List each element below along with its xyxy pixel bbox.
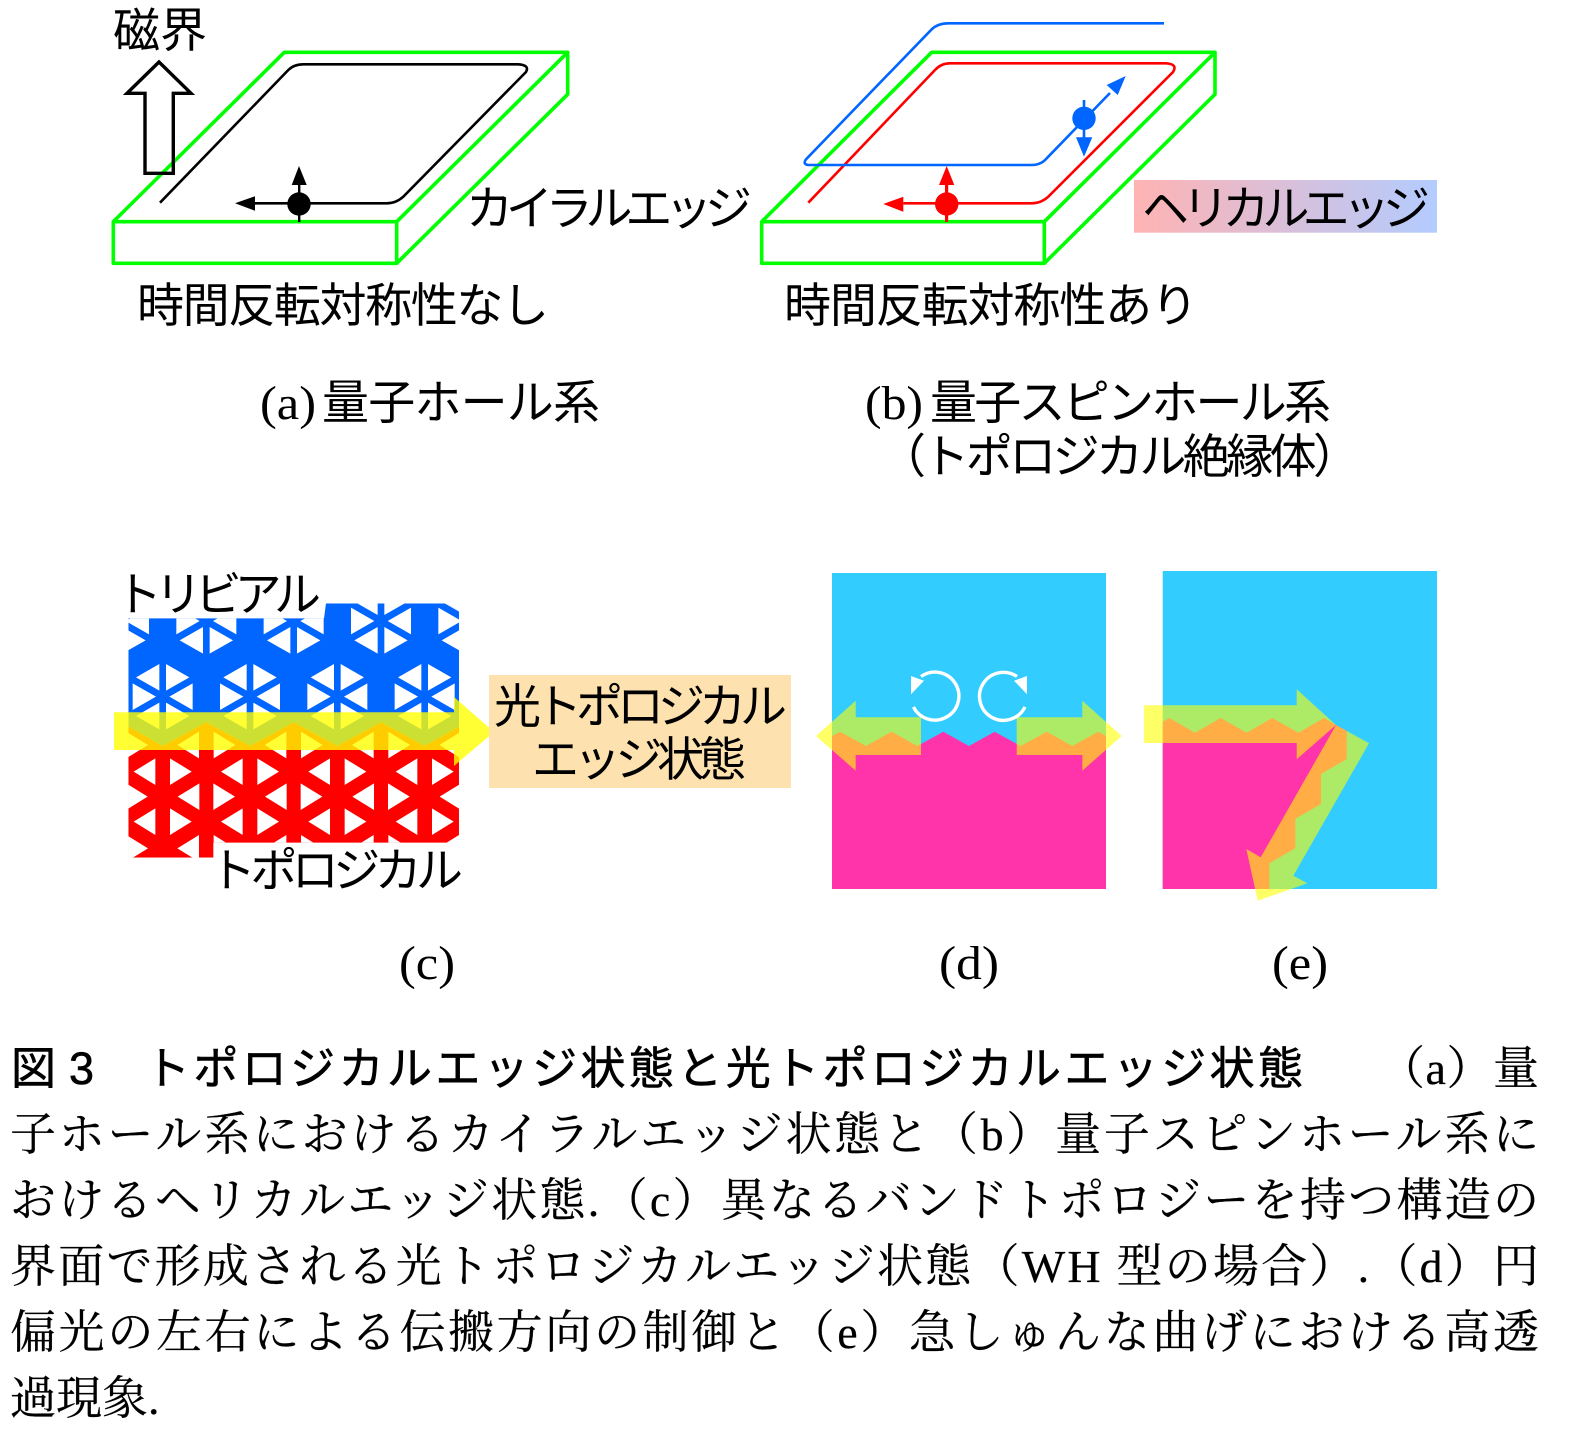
caption body: 偏光の左右による伝搬方向の制御と（e）急しゅんな曲げにおける高透	[10, 1307, 1539, 1358]
red helical edge path	[808, 63, 1174, 203]
icon: left circular polarisation	[911, 672, 959, 720]
caption body: 過現象.	[10, 1373, 160, 1424]
figure caption text	[10, 1043, 1539, 1424]
label: photonic topological edge state	[489, 675, 791, 788]
label: trivial: トリビアル	[115, 568, 321, 621]
icon: blue spin	[1072, 76, 1126, 157]
label: chiral edge: カイラルエッジ	[466, 182, 752, 235]
icon: spin dot and arrows	[235, 166, 311, 222]
arrow: horizontal edge state	[1144, 689, 1336, 759]
lattice: trivial and topological	[128, 604, 459, 858]
green slab b	[762, 52, 1215, 263]
panel c: photonic lattice interface	[82, 568, 791, 990]
magenta domain	[832, 732, 1106, 889]
panel e: sharp bend transmission	[1144, 571, 1437, 990]
label: magnetic field: 磁界	[113, 4, 207, 57]
label: photonic topological edge state: 光トポロジカル	[494, 680, 787, 733]
panel a: quantum Hall system	[113, 4, 752, 430]
background cyan	[832, 573, 1106, 889]
caption body: 界面で形成される光トポロジカルエッジ状態（WH 型の場合）.（d）円	[10, 1241, 1539, 1292]
blue helical edge path	[805, 23, 1164, 165]
caption e: (e)	[1272, 937, 1328, 990]
arrow: yellow edge state	[114, 697, 494, 766]
caption b	[865, 376, 1360, 483]
arrow: right going edge state	[1017, 701, 1122, 771]
caption body: おけるヘリカルエッジ状態.（c）異なるバンドトポロジーを持つ構造の	[10, 1175, 1539, 1226]
caption d: (d)	[939, 937, 999, 990]
caption a: 量子ホール系	[322, 376, 600, 429]
icon: right circular polarisation	[979, 672, 1027, 720]
caption b: (b)	[865, 377, 923, 430]
icon: magnetic field arrow	[127, 62, 191, 173]
caption heading: トポロジカルエッジ状態と光トポロジカルエッジ状態	[145, 1043, 1303, 1094]
label: no time reversal symmetry: 時間反転対称性なし	[137, 279, 549, 332]
caption body: 子ホール系におけるカイラルエッジ状態と（b）量子スピンホール系に	[10, 1109, 1539, 1160]
label: topological: トポロジカル	[209, 844, 463, 897]
chiral edge path	[160, 64, 527, 203]
green slab a	[113, 52, 568, 263]
label: photonic topological edge state: エッジ状態	[532, 733, 746, 786]
arrow: bent edge state	[1246, 725, 1369, 901]
label: time reversal symmetry: 時間反転対称性あり	[784, 279, 1198, 332]
caption heading: 3	[69, 1043, 94, 1094]
caption body	[10, 1043, 1539, 1424]
panel d: circular polarisation control	[816, 573, 1122, 990]
caption b: （トポロジカル絶縁体）	[879, 430, 1360, 483]
caption b: 量子スピンホール系	[930, 376, 1331, 429]
background cyan	[1163, 571, 1437, 889]
caption body: （a）量	[1379, 1043, 1539, 1094]
caption c: (c)	[399, 937, 455, 990]
panel b: quantum spin Hall system	[762, 23, 1437, 483]
magenta domain	[1163, 718, 1347, 889]
caption a: (a)	[260, 377, 316, 430]
label: helical edge: ヘリカルエッジ	[1142, 182, 1430, 235]
arrow: left going edge state	[816, 701, 921, 771]
caption heading: 図	[11, 1043, 56, 1094]
icon: red spin	[883, 166, 958, 222]
